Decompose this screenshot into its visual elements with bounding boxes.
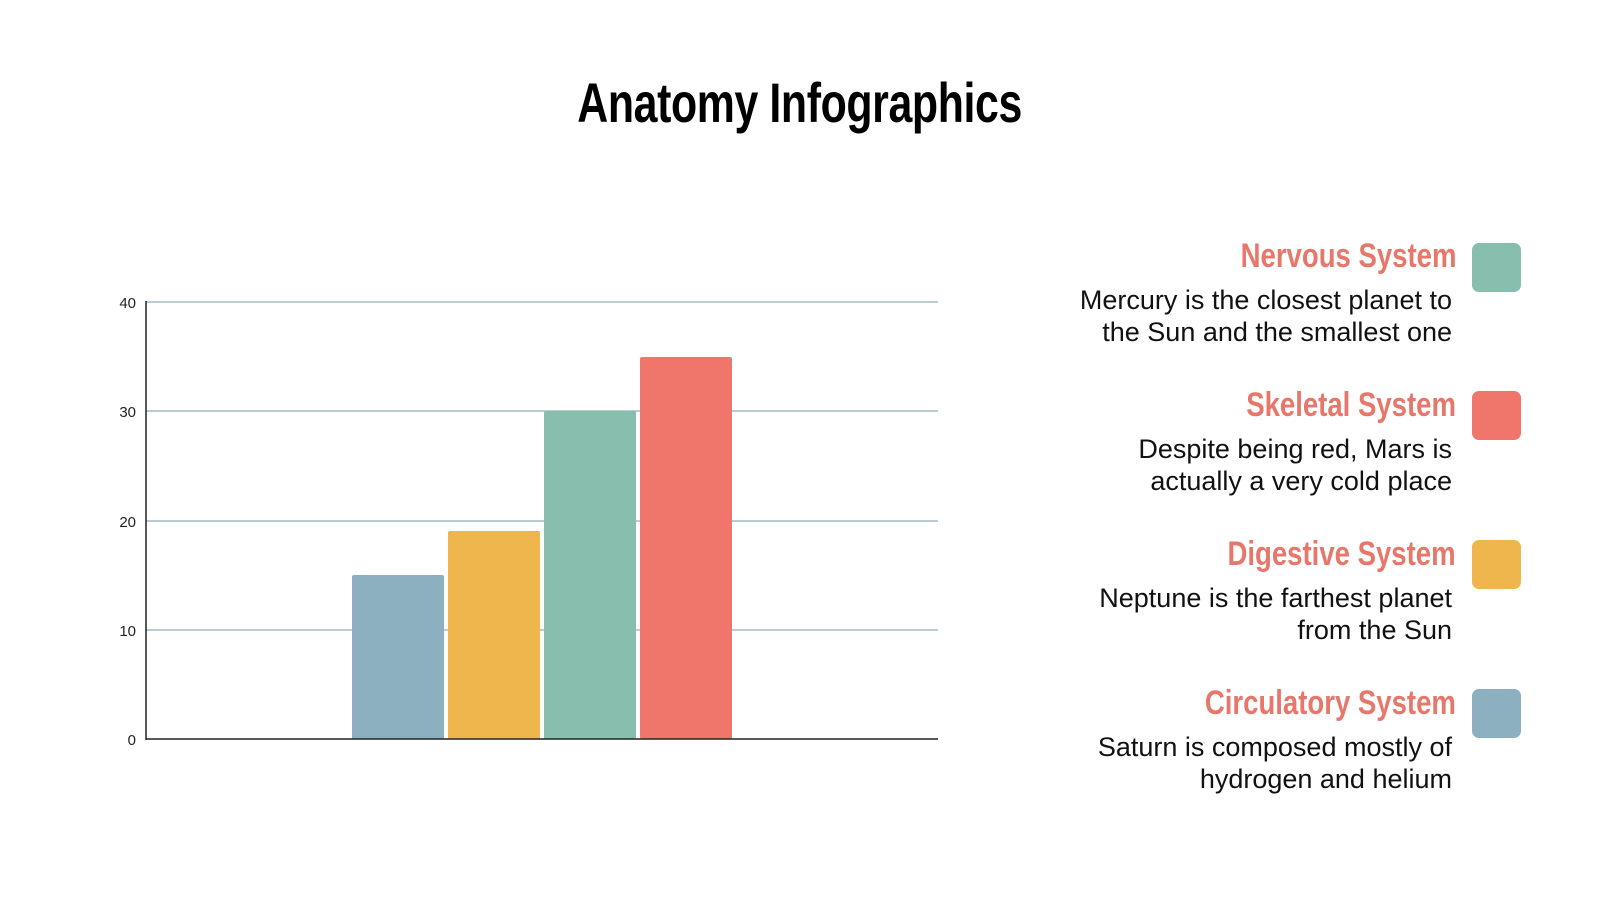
legend: skeletal: actually a very cold place — [1150, 466, 1452, 496]
legend: skeletal: Despite being red, Mars is — [1138, 434, 1452, 464]
legend: circulatory: Saturn is composed mostly of — [1098, 732, 1452, 762]
legend: circulatory: hydrogen and helium — [1200, 764, 1452, 794]
bar chart: 40 — [119, 295, 136, 312]
legend: digestive — [1099, 535, 1456, 645]
bar chart — [119, 295, 938, 749]
icon: yellow square — [1472, 540, 1521, 589]
legend: skeletal — [1138, 386, 1456, 496]
legend: digestive: Neptune is the farthest planet — [1099, 583, 1452, 613]
bar chart: 10 — [119, 623, 136, 640]
bar chart: 0 — [128, 732, 136, 749]
legend: digestive: Digestive System — [1228, 535, 1456, 573]
legend: circulatory — [1098, 684, 1456, 794]
legend: nervous — [1080, 237, 1456, 347]
icon: teal square — [1472, 243, 1521, 292]
icon: red square — [1472, 391, 1521, 440]
legend: circulatory: Circulatory System — [1205, 684, 1456, 722]
legend: skeletal: Skeletal System — [1246, 386, 1456, 424]
legend: digestive: from the Sun — [1297, 615, 1452, 645]
legend: nervous: Nervous System — [1240, 237, 1456, 275]
title: Anatomy Infographics — [578, 71, 1022, 134]
bar chart: 20 — [119, 514, 136, 531]
bar chart: 30 — [119, 404, 136, 421]
icon: blue square — [1472, 689, 1521, 738]
legend: nervous: Mercury is the closest planet to — [1080, 285, 1452, 315]
legend: nervous: the Sun and the smallest one — [1102, 317, 1452, 347]
